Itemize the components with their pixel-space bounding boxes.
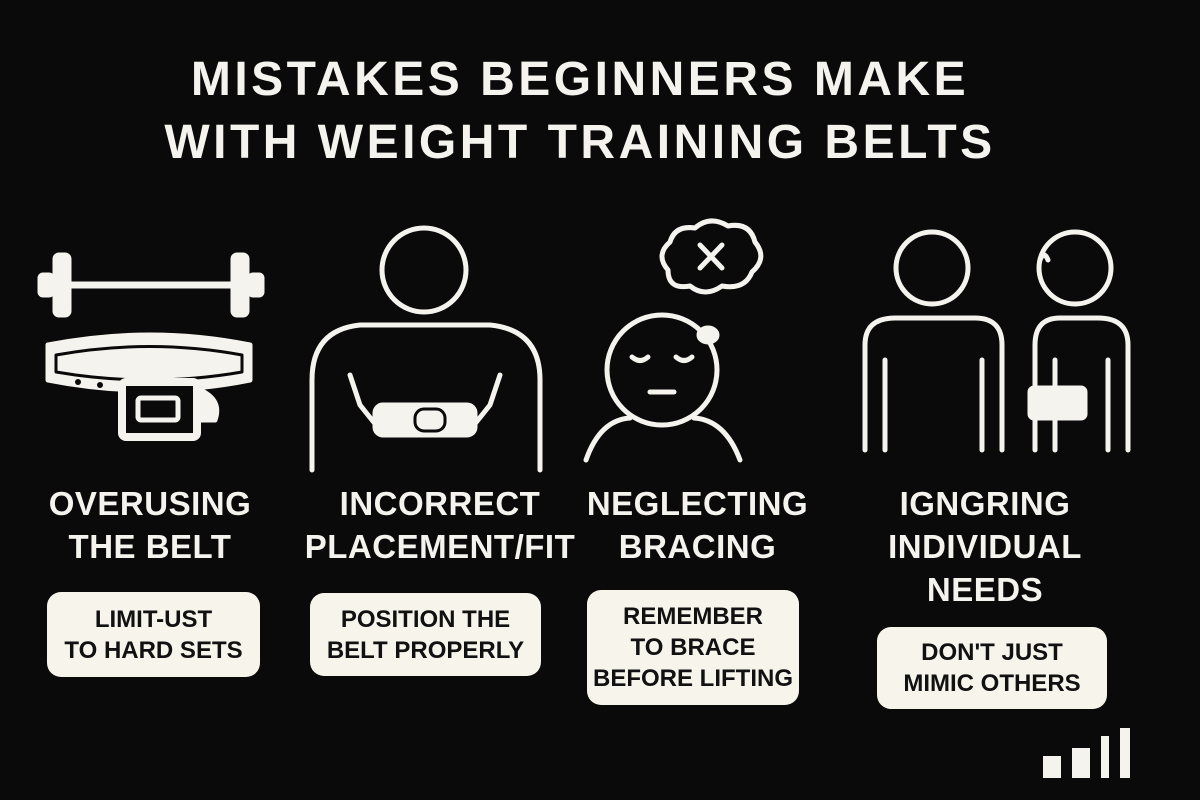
heading: overusing: OVERUSING [49, 485, 251, 522]
title: MISTAKES BEGINNERS MAKE [191, 53, 969, 106]
heading: bracing: BRACING [619, 528, 776, 565]
heading: needs: INDIVIDUAL [888, 528, 1082, 565]
box: mimic [877, 627, 1107, 709]
box: position [310, 593, 541, 676]
title [164, 53, 996, 169]
box: mimic: DON'T JUST [921, 639, 1063, 666]
box: position: BELT PROPERLY [327, 636, 524, 664]
heading: overusing [49, 485, 251, 565]
box: limit use: LIMIT-UST [95, 606, 212, 632]
heading: placement: INCORRECT [340, 485, 540, 522]
heading: bracing [587, 485, 808, 565]
heading: overusing: THE BELT [69, 528, 231, 565]
heading: placement [305, 485, 575, 565]
box: position: POSITION THE [341, 606, 510, 632]
box: mimic: MIMIC OTHERS [903, 670, 1081, 697]
icon: bars logo [1043, 728, 1130, 778]
title: WITH WEIGHT TRAINING BELTS [164, 116, 996, 169]
heading: needs: NEEDS [927, 571, 1043, 608]
heading: needs: IGNGRING [900, 485, 1070, 522]
heading: bracing: NEGLECTING [587, 485, 808, 522]
icon: two people [865, 232, 1128, 450]
box: brace: TO BRACE [631, 634, 755, 661]
icon: tired face with thought [586, 221, 761, 460]
box: brace [587, 590, 799, 705]
box: brace: REMEMBER [623, 603, 763, 630]
box: limit use [47, 592, 260, 677]
heading: placement: PLACEMENT/FIT [305, 528, 575, 565]
box: limit use: TO HARD SETS [64, 636, 243, 664]
heading: needs [888, 485, 1082, 608]
icon: person with belt [312, 228, 540, 470]
icon: barbell and belt [40, 255, 262, 437]
box: brace: BEFORE LIFTING [593, 665, 793, 692]
